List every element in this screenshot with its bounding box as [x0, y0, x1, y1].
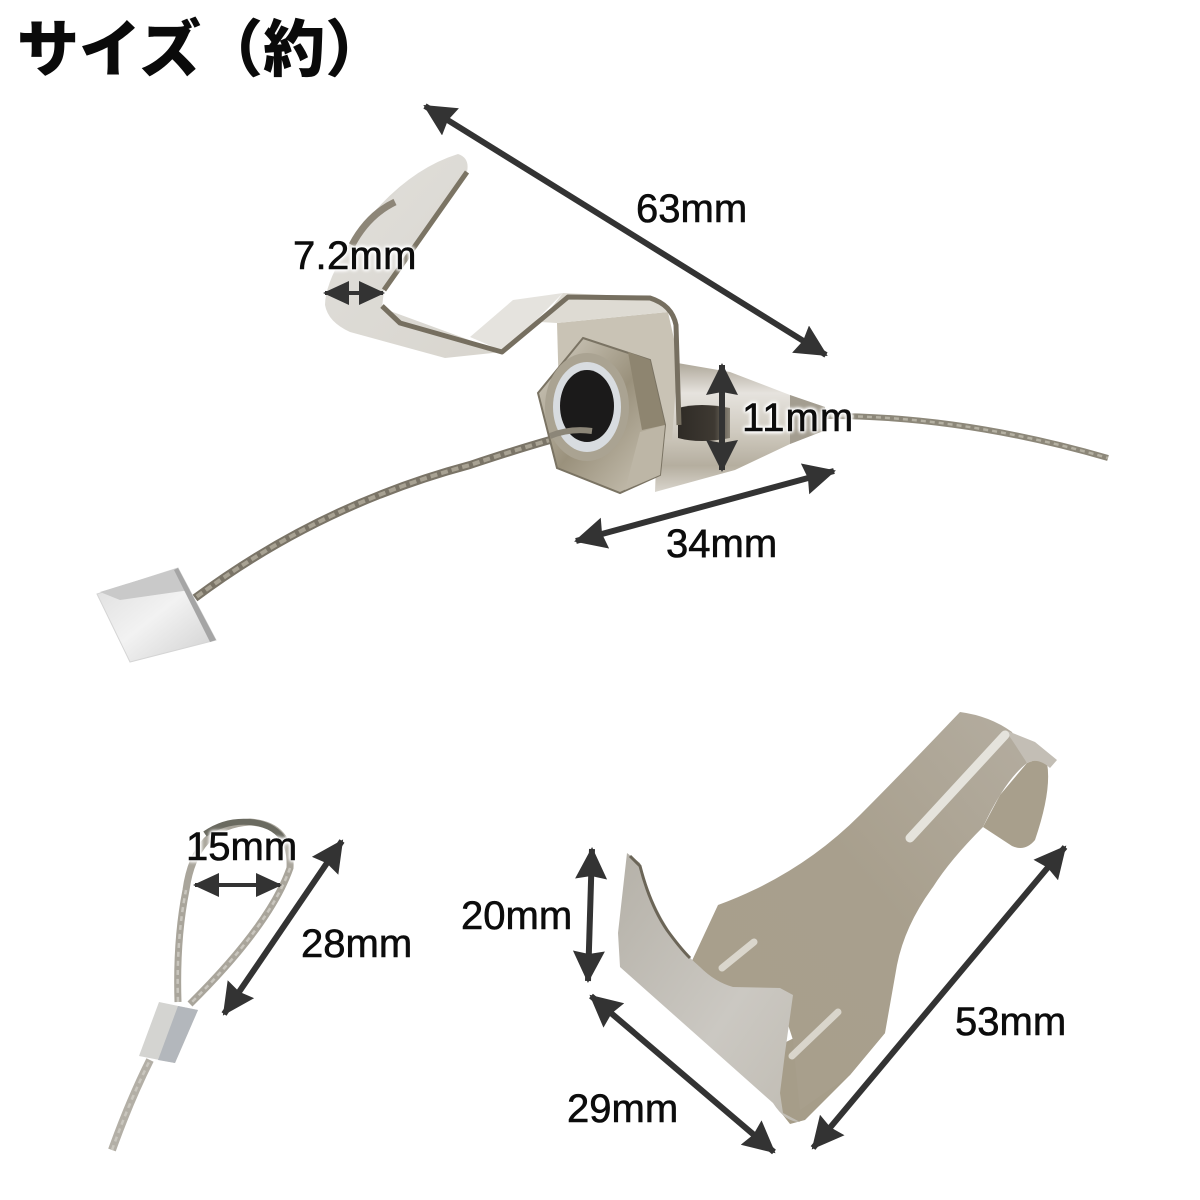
hanger body cone: [655, 360, 826, 492]
wire: left cable to ferrule: [195, 431, 585, 598]
arrow: 34mm: [576, 471, 834, 541]
hook front flare: [618, 853, 800, 1122]
ferrule: [97, 568, 216, 662]
arrow: 29mm: [591, 996, 774, 1152]
photo: wire loop with crimp: [112, 822, 290, 1150]
slit: upper: [910, 735, 1005, 838]
photo: cable hanger with hook, nut and wire: [97, 154, 1108, 662]
arrow: 63mm: [425, 106, 826, 355]
label: 29mm: 29mm: [567, 1087, 678, 1131]
label: 53mm: 53mm: [955, 1000, 1066, 1044]
hook strap: [325, 154, 679, 440]
label: 20mm: 20mm: [461, 894, 572, 938]
flare edge: [630, 856, 690, 958]
wire loop: [112, 822, 290, 1150]
arrow: 28mm: [224, 841, 342, 1014]
arrow: 53mm: [813, 847, 1065, 1148]
photo: flat hook: [618, 712, 1057, 1124]
arrow: 11mm: [719, 365, 725, 470]
slit: left: [722, 942, 754, 968]
bottom inner loop: [770, 1010, 885, 1124]
wire: right cable: [822, 416, 1108, 458]
label: 15mm: 15mm: [186, 825, 297, 869]
hook main body: [690, 712, 1027, 1110]
label: 11mm: 11mm: [742, 396, 854, 440]
arrow: 7.2mm: [325, 291, 383, 295]
arrow: 15mm: [195, 883, 280, 887]
hook back loop: [983, 760, 1048, 848]
slit: right: [792, 1012, 838, 1056]
label: 63mm: 63mm: [636, 187, 747, 231]
label: 28mm: 28mm: [301, 922, 412, 966]
hex nut with hole: [538, 338, 665, 493]
title: サイズ（約）: [17, 15, 387, 85]
label: 34mm: 34mm: [666, 522, 777, 566]
arrow: 20mm: [588, 849, 592, 981]
label: 7.2mm: 7.2mm: [293, 234, 417, 278]
crimp sleeve: [139, 1002, 198, 1063]
hook loop end: [1005, 730, 1057, 768]
